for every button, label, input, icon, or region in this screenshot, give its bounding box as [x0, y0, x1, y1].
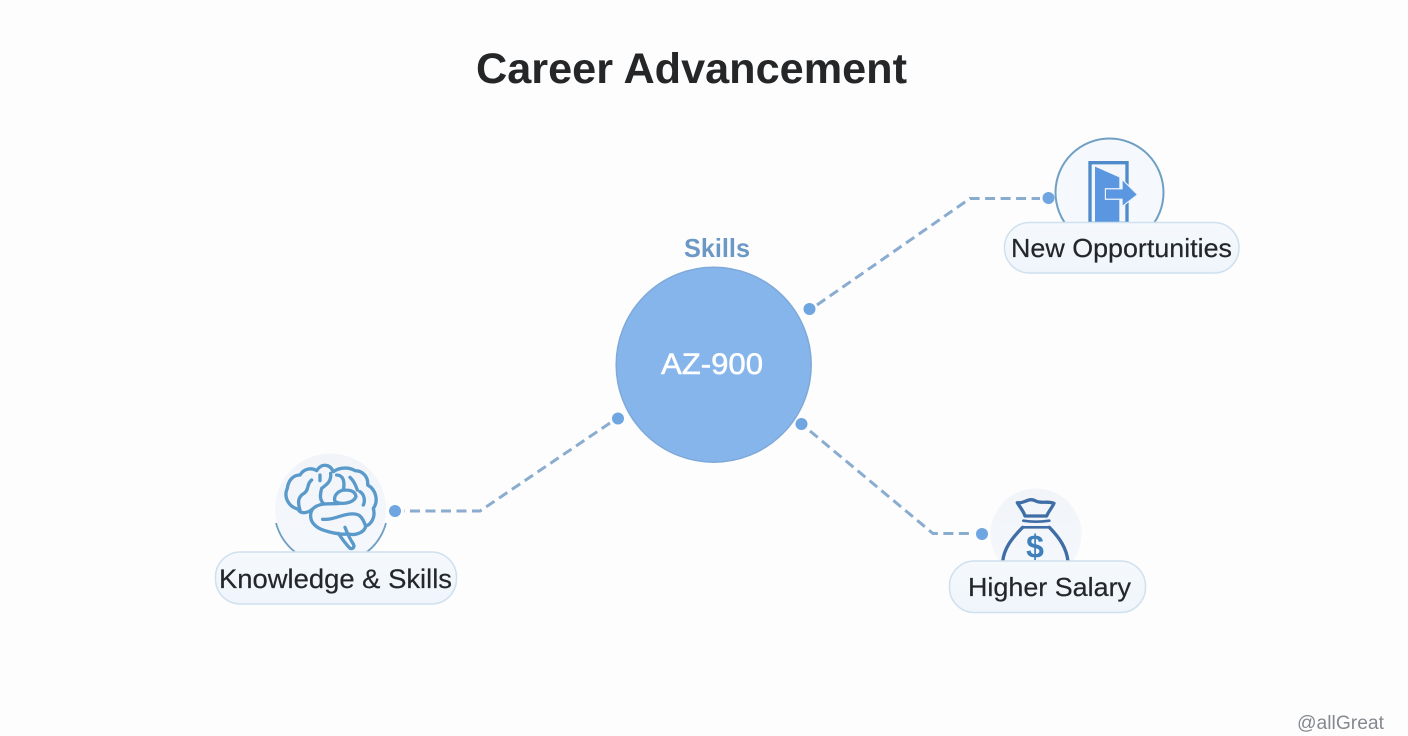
node: Higher Salary	[950, 488, 1146, 612]
icon: money bag: $	[1026, 528, 1044, 564]
central circle: AZ-900	[616, 267, 811, 462]
connector: AZ-900 to Higher Salary	[796, 418, 988, 540]
icon: door with exit arrow	[1056, 138, 1164, 246]
label pill: Knowledge & Skills: Knowledge & Skills	[219, 564, 452, 594]
label pill: New Opportunities: New Opportunities	[1011, 233, 1232, 263]
icon: brain	[275, 454, 386, 564]
label pill: Higher Salary: Higher Salary	[968, 572, 1131, 602]
label pill: Knowledge & Skills	[216, 552, 456, 604]
connector: AZ-900 to New Opportunities	[804, 192, 1054, 315]
label pill: Higher Salary	[950, 561, 1146, 612]
central circle: AZ-900: AZ-900	[661, 348, 763, 381]
title: Career Advancement	[476, 45, 907, 93]
node: Knowledge & Skills	[216, 454, 456, 604]
label pill: New Opportunities	[1004, 222, 1239, 273]
connector: AZ-900 to Knowledge & Skills	[389, 412, 624, 517]
label: Skills: Skills	[684, 233, 750, 263]
watermark: @allGreat	[1297, 713, 1385, 734]
icon: money bag	[990, 488, 1082, 580]
node: New Opportunities	[1004, 138, 1239, 273]
